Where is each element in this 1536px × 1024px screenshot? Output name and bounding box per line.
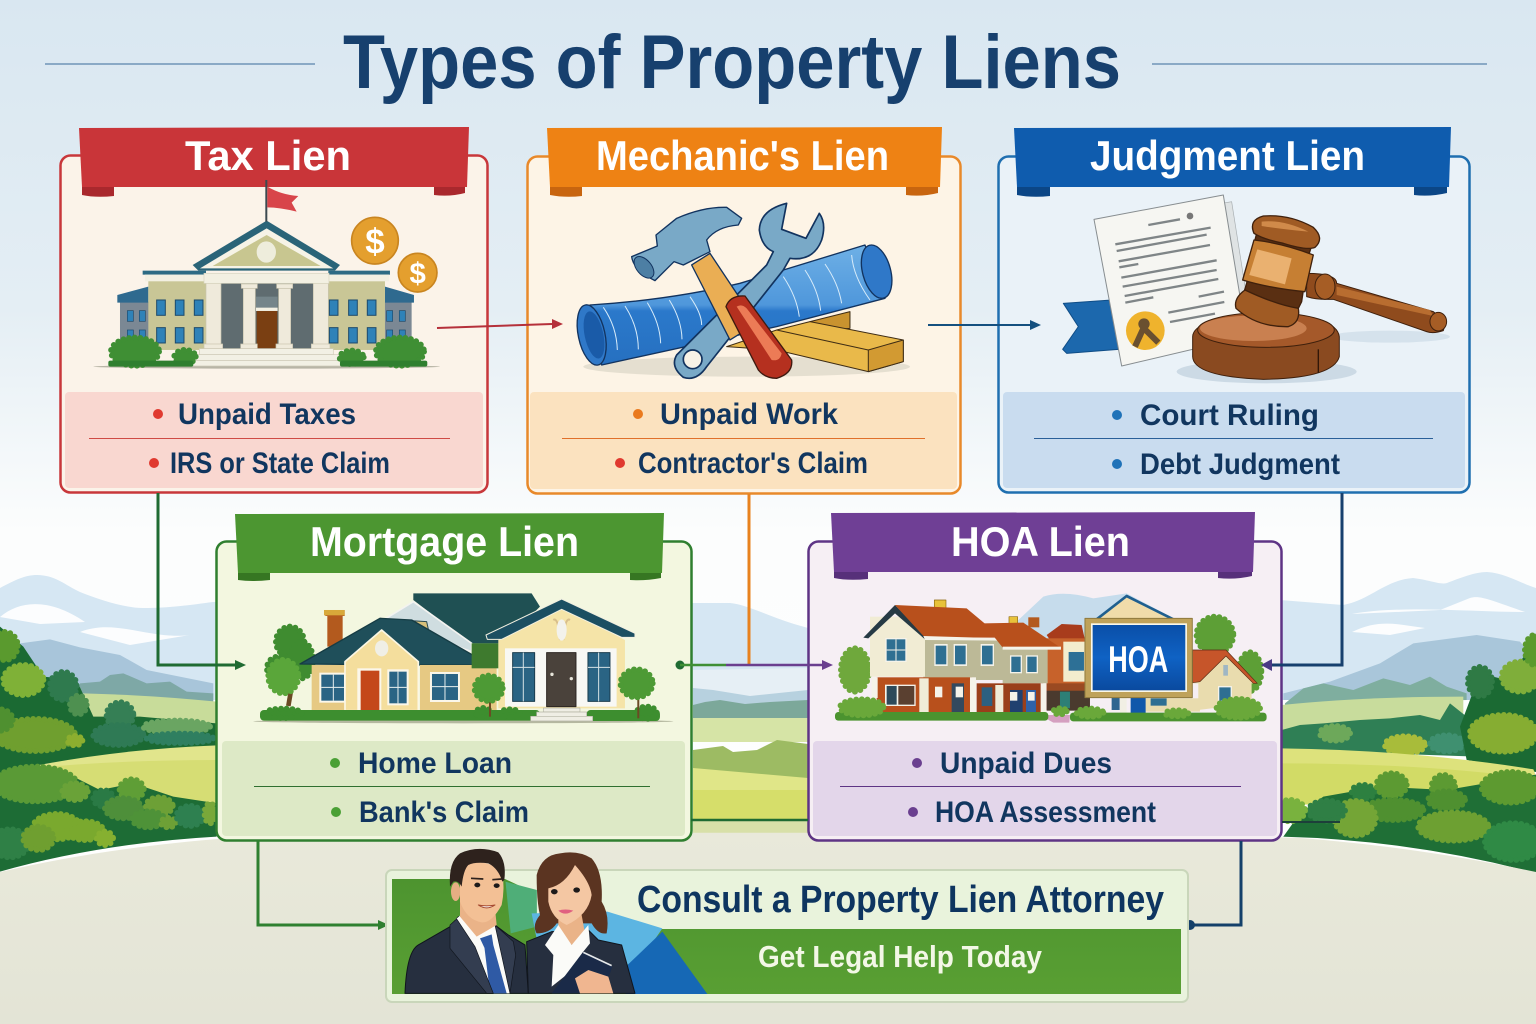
- call to action panel: [386, 849, 1188, 1002]
- list: Mortgage Lien points: Bank's Claim: [359, 796, 529, 829]
- HOA Lien banner: [831, 512, 1255, 580]
- green action band: [392, 879, 1181, 994]
- Tax Lien banner: [79, 127, 469, 197]
- list: Mortgage Lien points: Home Loan: [358, 747, 512, 780]
- connector: lower navy link: [1282, 821, 1340, 823]
- list: HOA Lien points: Unpaid Dues: [940, 747, 1112, 780]
- icon: courthouse with coins: [93, 180, 440, 369]
- backdrop shapes: [505, 882, 707, 994]
- list: Judgment Lien points: Debt Judgment: [1140, 448, 1340, 481]
- list: HOA Lien points: HOA Assessment: [935, 796, 1156, 829]
- list: Tax Lien points: Unpaid Taxes: [178, 398, 356, 431]
- HOA Lien banner: HOA Lien: [951, 518, 1130, 565]
- icon: gavel and court document: [1063, 195, 1450, 383]
- list: Judgment Lien points: Court Ruling: [1140, 399, 1319, 432]
- list: Mechanic's Lien points: Contractor's Claim: [638, 447, 868, 480]
- list: Mortgage Lien points: [330, 747, 529, 829]
- arrow: judgment to HOA: [1261, 493, 1342, 671]
- left scenery: [0, 627, 217, 872]
- icon: courthouse with coins: $: [365, 222, 385, 261]
- icon: HOA neighbourhood with sign: [835, 593, 1267, 723]
- panel: Mechanic's Lien: [528, 127, 960, 494]
- panel: Tax Lien: [60, 127, 488, 492]
- list: Tax Lien points: [149, 398, 390, 480]
- subheading: Get Legal Help Today: [758, 939, 1043, 974]
- arrow: mechanic's to HOA: [748, 494, 750, 665]
- arrow: tax to mortgage: [158, 493, 246, 670]
- list: HOA Lien points: [908, 747, 1156, 829]
- Tax Lien banner: Tax Lien: [185, 132, 351, 179]
- arrow: mechanic's to judgment: [928, 320, 1041, 330]
- Mortgage Lien banner: [235, 513, 664, 581]
- icon: suburban homes: [253, 593, 673, 723]
- background landscape: [0, 572, 1536, 1024]
- icon: hammer, wrench, blueprint and lumber: [572, 203, 910, 378]
- icon: HOA neighbourhood with sign: HOA: [1108, 638, 1168, 680]
- arrow: mortgage to attorney: [258, 841, 389, 930]
- list: Tax Lien points: IRS or State Claim: [170, 447, 390, 480]
- panel: Judgment Lien: [998, 127, 1470, 492]
- Judgment Lien banner: Judgment Lien: [1090, 132, 1365, 179]
- Mechanic's Lien banner: [547, 127, 942, 197]
- attorney portraits: [405, 849, 635, 993]
- Judgment Lien banner: [1014, 127, 1451, 197]
- Mechanic's Lien banner: Mechanic's Lien: [596, 132, 889, 179]
- list: Mechanic's Lien points: Unpaid Work: [660, 398, 838, 431]
- right scenery: [1275, 635, 1536, 875]
- panel: Mortgage Lien: [216, 513, 692, 840]
- arrow: mortgage to HOA: [676, 660, 833, 670]
- icon: courthouse with coins: $: [409, 257, 426, 290]
- consult heading: Consult a Property Lien Attorney: [637, 879, 1164, 921]
- title: Types of Property Liens: [343, 20, 1121, 105]
- list: Mechanic's Lien points: [615, 398, 868, 480]
- panel: HOA Lien: [808, 512, 1282, 840]
- arrow: tax to mechanic's: [437, 319, 563, 329]
- arrow: HOA to attorney: [1185, 841, 1241, 930]
- list: Judgment Lien points: [1112, 399, 1340, 481]
- Mortgage Lien banner: Mortgage Lien: [310, 518, 579, 565]
- connector: lower green link: [691, 819, 808, 821]
